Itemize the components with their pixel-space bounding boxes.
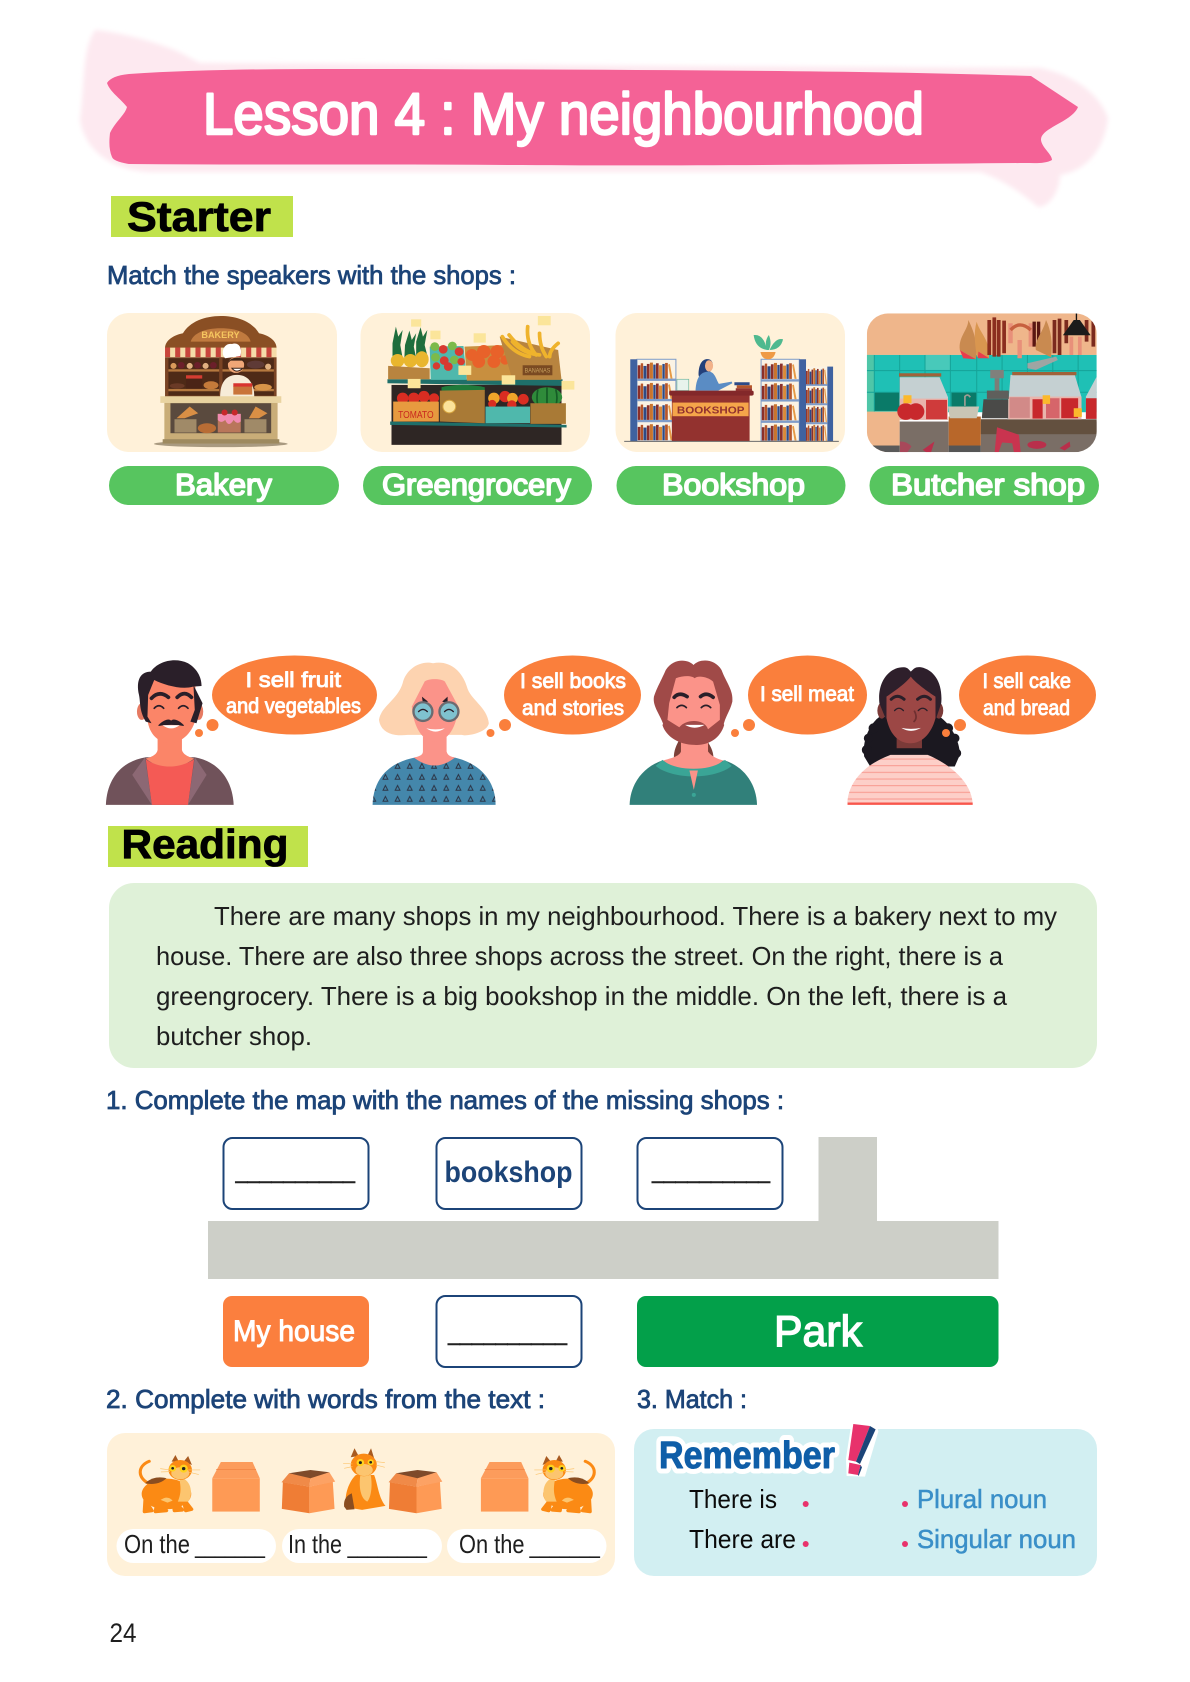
match right terms: Singular noun [917,1524,1076,1554]
thought bubble 2: and stories [522,697,624,720]
shop label: Bakery [109,466,339,505]
speaker 2: woman with glasses [373,663,496,805]
match right terms [917,1484,1076,1554]
map box: my house [223,1296,369,1367]
match dots [803,1501,908,1547]
shop card: bakery: BAKERY [201,330,240,340]
shop card: greengrocery: BANANAS [525,368,550,375]
match right terms: Plural noun [917,1484,1047,1514]
answer pill 2: ________ [347,1531,428,1559]
map box: blank left [224,1138,368,1209]
icon: exclamation mark [846,1422,878,1477]
thought bubble 4 [942,656,1096,737]
thought bubble 2: I sell books [520,670,626,693]
apples [430,346,467,380]
tomato crate [397,393,408,404]
speaker 1: man with moustache [106,660,234,805]
watermelon [532,387,562,407]
shop card: bookshop [616,313,845,452]
cucumber crate [442,385,485,391]
shop card: greengrocery [360,313,590,452]
thought bubble 3 [731,656,867,737]
neighbourhood map [208,1137,998,1367]
map box: bookshop [436,1138,582,1209]
page number: 24 [110,1618,136,1648]
bananas [500,337,562,380]
speaker 4: woman with curly hair [847,667,973,805]
answer pill 3: _______ [529,1531,601,1559]
map box: park [637,1296,998,1367]
shop card: butcher shop [867,313,1097,452]
prepositions panel [107,1433,615,1576]
shop label: Greengrocery: Greengrocery [382,467,571,502]
map box: park: Park [774,1307,863,1356]
reading passage panel: greengrocery. There is a big bookshop in the middle. On the left, there is a [156,981,1008,1011]
reading passage panel [109,883,1097,1068]
cat beside box left [140,1455,260,1512]
question 1 heading: 1. Complete the map with the names of the missing shops : [106,1085,784,1115]
speaker 3: man with beard [630,660,757,805]
answer pill 2: In the [288,1529,342,1559]
remember title: Remember [659,1435,835,1477]
cat between open boxes [281,1448,442,1513]
cat beside box right [481,1455,594,1512]
map box: bookshop: bookshop [444,1156,572,1189]
answer pill 2 [282,1529,442,1563]
map box: blank right [638,1138,782,1209]
reading passage panel: There are many shops in my neighbourhood. There is a bakery next to my [214,901,1057,931]
shop card: greengrocery: TOMATO [398,410,434,421]
title: Lesson 4 : My neighbourhood [203,82,924,147]
answer pill 3 [447,1529,606,1563]
thought bubble 1: and vegetables [226,695,361,718]
reading passage panel: house. There are also three shops across the street. On the right, there is a [156,941,1004,971]
heading: Reading: Reading [122,821,288,867]
map box: blank lower: __________ [447,1319,568,1346]
shop label: Bakery: Bakery [175,467,272,502]
reading passage panel: butcher shop. [156,1021,312,1051]
shop label: Bookshop [616,466,846,505]
thought bubble 1: I sell fruit [246,669,341,692]
pineapples [393,327,428,358]
map box: blank right: __________ [651,1157,771,1184]
answer pill 1: _______ [194,1531,266,1559]
oranges [465,345,512,381]
shop card: bookshop: BOOKSHOP [677,406,745,417]
heading: Starter: Starter [127,193,271,240]
road [208,1137,998,1279]
thought bubble 4: I sell cake [982,670,1071,693]
peppers [488,393,500,404]
match left terms [689,1484,796,1554]
thought bubble 4: and bread [983,697,1070,720]
thought bubble 1 [195,656,377,737]
shop label: Bookshop: Bookshop [662,467,805,502]
match left terms: There is [689,1484,777,1514]
remember title: Remember [659,1435,835,1477]
instruction: match: Match the speakers with the shops : [107,260,516,290]
shop card: bakery [107,313,337,452]
shop label: Butcher shop: Butcher shop [891,467,1085,502]
match left terms: There are [689,1524,796,1554]
question 3 heading: 3. Match : [637,1384,747,1414]
thought bubble 3: I sell meat [760,683,854,706]
thought bubble 2 [486,656,641,737]
cats and boxes illustration [140,1448,594,1513]
question 2 heading: 2. Complete with words from the text : [106,1384,545,1414]
price tags [411,319,421,327]
remember panel [634,1422,1097,1576]
map box: blank left: __________ [235,1157,356,1184]
brush stroke halo [80,30,1108,207]
pink ribbon [107,69,1078,165]
map box: blank lower [436,1296,582,1367]
answer pill 1: On the [124,1529,190,1559]
map box: my house: My house [233,1315,355,1348]
answer pill 1 [116,1529,276,1563]
answer pill 3: On the [459,1529,524,1559]
title banner [80,30,1108,207]
